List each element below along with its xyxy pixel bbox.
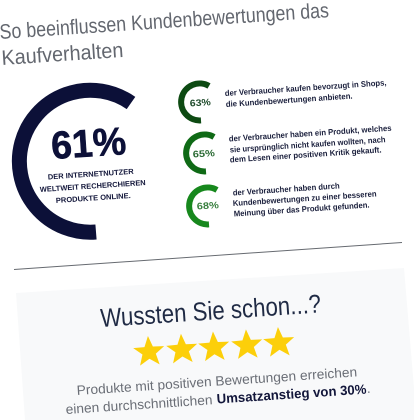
text: 65% description: der Verbraucher haben ein Produkt, welches xyxy=(229,124,392,143)
body text: . xyxy=(366,381,371,396)
panel: 61% main statistic xyxy=(19,90,146,232)
ring caption: WELTWEIT RECHERCHIEREN xyxy=(40,178,146,194)
text: 65% description: sie ursprünglich nicht kaufen wollten, nach xyxy=(230,135,386,154)
heading: Wussten Sie schon...? xyxy=(99,288,322,333)
ring caption: DER INTERNETNUTZER xyxy=(48,167,135,181)
title: Kaufverhalten xyxy=(1,39,124,70)
ring: 68% xyxy=(189,187,217,224)
statistic: 68% xyxy=(189,181,377,224)
text: 68% description xyxy=(233,181,377,218)
text: 68% description: Kundenbewertungen zu einer besseren xyxy=(233,189,377,208)
body text: Umsatzanstieg von 30% xyxy=(216,382,367,406)
title xyxy=(0,0,330,70)
statistic: 63% xyxy=(181,78,387,120)
text: 68% description: Meinung über das Produkt gefunden. xyxy=(234,201,370,218)
body text: einen durchschnittlichen xyxy=(65,392,213,417)
body text xyxy=(65,364,371,417)
ring caption xyxy=(40,167,146,205)
text: 63% description: der Verbraucher kaufen bevorzugt in Shops, xyxy=(225,78,387,98)
text: 63% description: die Kundenbewertungen anbieten. xyxy=(226,92,353,109)
ring: 63% xyxy=(181,83,209,120)
ring caption: PRODUKTE ONLINE. xyxy=(56,191,131,205)
label: 68%: 68% xyxy=(196,200,220,212)
statistic: 65% xyxy=(186,124,392,171)
text: 65% description: dem Lesen einer positiven Kritik gekauft. xyxy=(230,145,382,164)
panel background xyxy=(16,268,414,420)
label: 63%: 63% xyxy=(189,97,212,109)
icon: five stars xyxy=(132,326,295,366)
body text: Produkte mit positiven Bewertungen erreichen xyxy=(76,364,358,398)
ring: 65% xyxy=(186,134,214,171)
label: 65%: 65% xyxy=(192,148,216,160)
text: 63% description xyxy=(225,78,387,109)
ring chart: 61% xyxy=(19,90,131,232)
text: 65% description xyxy=(229,124,392,164)
panel: Wussten Sie schon xyxy=(16,268,414,420)
big number: 61%: 61% xyxy=(50,120,127,168)
text: 68% description: der Verbraucher haben durch xyxy=(233,181,340,197)
